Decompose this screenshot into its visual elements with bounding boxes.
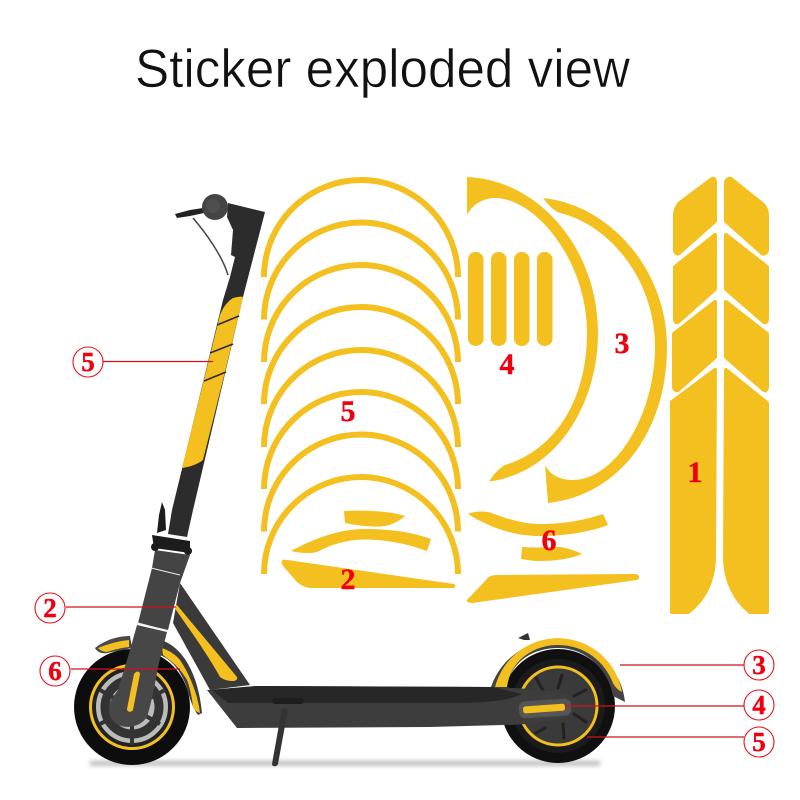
label: 6 on sheet: 6 — [542, 524, 556, 557]
sticker group 1: stem chevron strips — [672, 179, 767, 612]
rear fender sticker — [495, 638, 622, 692]
label: 1 on sheet: 1 — [688, 456, 702, 489]
panel: exploded sticker sheet — [264, 177, 767, 612]
callout: 5 rear rim: 5 — [752, 727, 766, 757]
sticker group 3: rear fender crescent — [543, 198, 667, 503]
kickstand mount — [272, 698, 304, 704]
kickstand — [272, 708, 288, 766]
deck — [207, 686, 575, 728]
callout: 4 swing arm — [565, 690, 774, 720]
front fender sticker left — [98, 640, 129, 652]
deck top surface — [212, 686, 522, 703]
throttle detail — [206, 199, 220, 213]
label: 4 on sheet: 4 — [500, 348, 514, 381]
brace sticker — [176, 605, 237, 681]
callout: 6 front fender: 6 — [48, 656, 62, 686]
callout: 4 swing arm: 4 — [752, 690, 766, 720]
sticker group 4: four rounded bars — [468, 252, 552, 346]
sticker group 5: wheel rim arcs — [264, 180, 458, 574]
sticker group 2: frame pieces — [282, 511, 455, 588]
callout: 5 rear rim — [587, 727, 774, 757]
front brace — [173, 583, 250, 690]
scooter illustration — [74, 194, 625, 766]
folding tube — [138, 550, 190, 630]
label: 2 on sheet: 2 — [340, 563, 356, 596]
front fender forward part — [160, 640, 202, 715]
label: 3 on sheet: 3 — [614, 327, 630, 360]
swing arm cover — [519, 698, 572, 719]
front wheel — [74, 649, 190, 765]
front fender sticker right — [162, 648, 200, 713]
brake lever and cable — [175, 208, 228, 275]
stem sticker 5 — [182, 297, 243, 468]
swing arm sticker — [523, 704, 565, 714]
callout: 3 rear fender: 3 — [752, 650, 766, 680]
rear wheel — [501, 649, 615, 763]
label: 5 on sheet: 5 — [340, 395, 356, 428]
clamp highlight lines — [138, 568, 180, 631]
sticker group 6: front fender pieces — [467, 512, 639, 603]
rear fender — [491, 640, 625, 702]
fork sticker — [127, 672, 140, 712]
callout: 5 stem — [73, 347, 213, 377]
callout: 6 front fender — [40, 656, 180, 686]
rear fender clip — [518, 633, 530, 640]
front fender rear part — [95, 636, 132, 653]
ground shadow — [90, 761, 600, 766]
fork — [109, 625, 167, 727]
sticker group 4: fender crescent — [467, 177, 598, 482]
callout: 5 stem: 5 — [81, 347, 95, 377]
callout: 2 brace — [35, 593, 176, 623]
handlebar grip — [202, 194, 228, 220]
folding clamp — [151, 502, 192, 555]
callout: 2 brace: 2 — [43, 593, 57, 623]
title: Sticker exploded view — [135, 39, 631, 99]
stem — [168, 203, 265, 537]
callout: 3 rear fender — [620, 650, 774, 680]
